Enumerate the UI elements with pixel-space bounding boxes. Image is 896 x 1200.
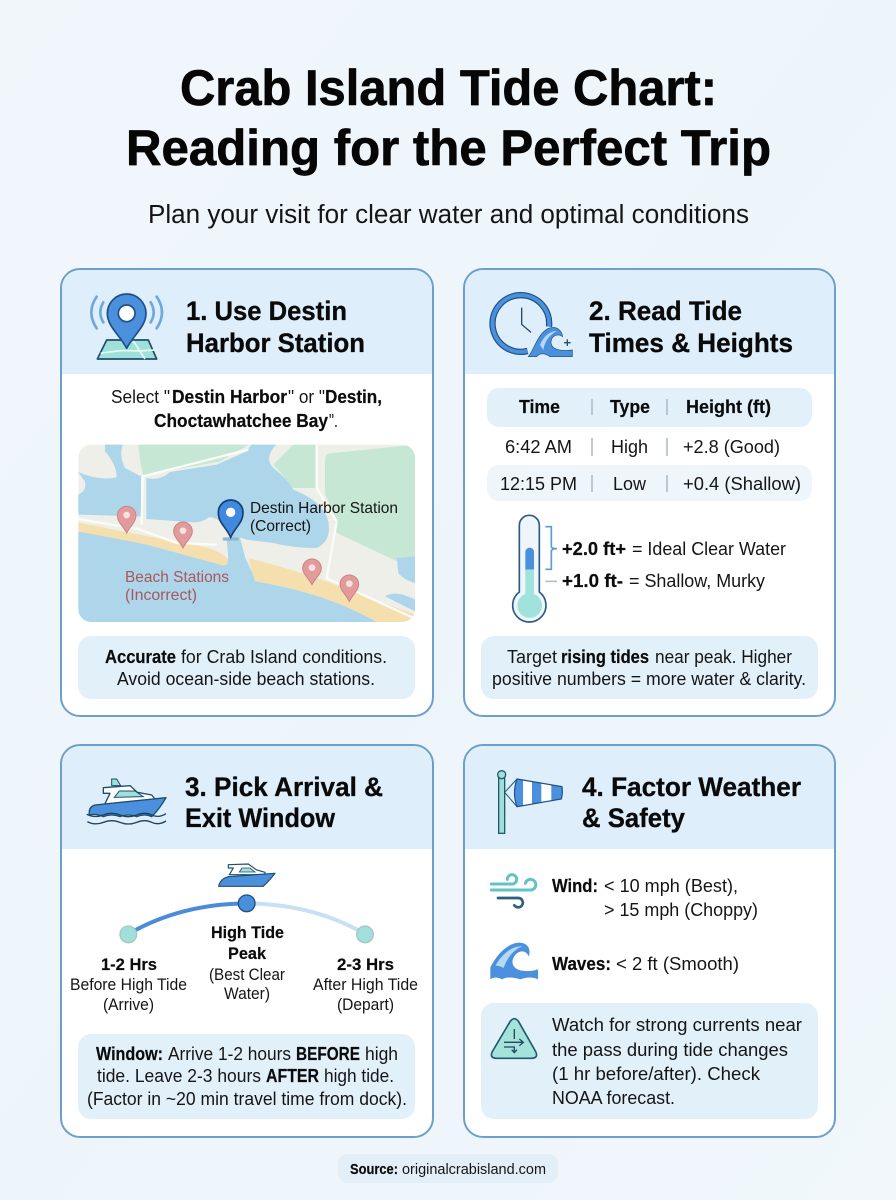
map labels: correct: Destin Harbor Station: [250, 500, 398, 517]
label: after high tide: 2-3 Hrs: [337, 956, 394, 974]
panel 1 heading: Harbor Station: [186, 328, 365, 358]
gauge labels: = Ideal Clear Water: [632, 538, 786, 559]
gauge labels: = Shallow, Murky: [629, 570, 766, 591]
panel: 2. Read Tide Times & Heights: [464, 269, 835, 716]
panel 1 instruction: Choctawhatchee Bay: [154, 411, 328, 431]
map labels: incorrect: Beach Stations: [125, 569, 229, 586]
tide table: Height (ft): [686, 396, 771, 417]
map labels: incorrect: (Incorrect): [125, 587, 197, 604]
tide table: 12:15 PM: [500, 473, 577, 494]
panel 2 heading: [589, 296, 793, 358]
panel 4 callout: NOAA forecast.: [552, 1087, 675, 1108]
panel 1 instruction: ".: [329, 411, 338, 431]
label: high tide peak: (Best Clear: [209, 966, 285, 984]
panel 2 heading: Times & Heights: [589, 328, 793, 358]
panel 2 callout: [481, 636, 818, 699]
panel 3 callout: AFTER: [266, 1066, 319, 1086]
panel 4 heading: & Safety: [582, 803, 685, 833]
waves text: Waves:: [552, 953, 611, 974]
beach station pins: [117, 506, 359, 601]
wind text: [552, 875, 758, 920]
panel 4 heading: 4. Factor Weather: [582, 772, 801, 802]
panel 1 callout: Accurate: [105, 647, 176, 667]
panel: 3. Pick Arrival & Exit Window: [61, 745, 433, 1137]
panel 3 header band: [62, 746, 432, 849]
tide table: [487, 388, 812, 501]
tide table: +2.8 (Good): [683, 436, 780, 457]
panel 3 callout: (Factor in ~20 min travel time from dock).: [87, 1089, 407, 1109]
icon: wind: [491, 875, 536, 907]
panel 1 header band: [62, 270, 432, 374]
panel 3 heading: 3. Pick Arrival &: [185, 772, 383, 802]
gauge labels: [562, 538, 786, 591]
source pill: [338, 1154, 558, 1183]
icon: clock with wave: [493, 295, 572, 357]
panel 1 heading: [186, 296, 365, 358]
tide table: Time: [519, 396, 560, 417]
panel 1 callout: [78, 636, 415, 699]
wind text: < 10 mph (Best),: [604, 875, 738, 896]
panel 2 callout: Target: [507, 647, 557, 667]
waves text: < 2 ft (Smooth): [616, 953, 739, 974]
panel 1 instruction: Destin,: [325, 387, 382, 407]
label: after high tide: After High Tide: [313, 976, 418, 994]
panel 3 callout: high tide.: [324, 1066, 394, 1086]
label: before high tide: Before High Tide: [70, 976, 187, 994]
label: high tide peak: High Tide: [211, 924, 284, 942]
panel 3 heading: [185, 772, 383, 833]
panel 1 instruction: [111, 387, 382, 431]
gauge labels: +1.0 ft-: [562, 570, 623, 591]
map labels: incorrect: [125, 569, 229, 604]
panel: 1. Use Destin Harbor Station: [61, 269, 433, 716]
icon: boat on waves: [87, 779, 166, 824]
panel: 4. Factor Weather & Safety: [464, 745, 835, 1137]
correct station pin: [218, 500, 243, 541]
panel 3 callout: [78, 1034, 415, 1119]
tide table: 6:42 AM: [505, 436, 572, 457]
map labels: correct: (Correct): [250, 518, 311, 535]
panel 3 callout: Arrive 1-2 hours: [168, 1044, 291, 1064]
panel 1 instruction: " or ": [288, 387, 325, 407]
tide window arc diagram: [120, 864, 373, 943]
map labels: correct: [250, 500, 398, 535]
label: after high tide: [313, 956, 418, 1014]
tide table: Low: [613, 473, 647, 494]
wind text: Wind:: [552, 875, 598, 896]
gauge labels: +2.0 ft+: [562, 538, 626, 559]
small boat above peak: [219, 864, 275, 886]
waves text: [552, 953, 739, 974]
title: Reading for the Perfect Trip: [126, 120, 771, 176]
panel 3 callout: tide. Leave 2-3 hours: [97, 1066, 261, 1086]
panel 3 callout: BEFORE: [296, 1044, 360, 1064]
panel 3 callout: Window:: [96, 1044, 163, 1064]
icon: wave: [490, 943, 538, 979]
source pill: Source:: [350, 1162, 398, 1178]
panel 1 callout: Avoid ocean-side beach stations.: [117, 669, 375, 689]
label: high tide peak: Peak: [228, 945, 267, 963]
label: before high tide: (Arrive): [103, 996, 154, 1014]
panel 2 callout: rising tides: [561, 647, 649, 667]
panel 1 heading: 1. Use Destin: [186, 296, 347, 326]
wind text: > 15 mph (Choppy): [604, 899, 758, 920]
icon: windsock: [498, 771, 564, 833]
label: high tide peak: [209, 924, 285, 1003]
subtitle: Plan your visit for clear water and optimal conditions: [148, 201, 749, 229]
panel 3 heading: Exit Window: [185, 803, 336, 833]
tide table: High: [611, 436, 648, 457]
panel 3 callout: high: [365, 1044, 398, 1064]
tide table: Type: [610, 396, 650, 417]
title: [126, 60, 771, 176]
icon: map pin with signal: [91, 294, 162, 359]
title: Crab Island Tide Chart:: [180, 60, 717, 116]
panel 1 instruction: Select ": [111, 387, 170, 407]
source pill: originalcrabisland.com: [402, 1162, 546, 1178]
panel 2 callout: positive numbers = more water & clarity.: [492, 669, 806, 689]
panel 4 callout: Watch for strong currents near: [552, 1014, 802, 1035]
panel 4 heading: [582, 772, 801, 833]
label: before high tide: [70, 956, 187, 1014]
panel 4 header band: [465, 746, 834, 849]
panel 4 callout: (1 hr before/after). Check: [552, 1063, 761, 1084]
map of Destin harbor and beach stations: [78, 444, 415, 622]
panel 1 instruction: Destin Harbor: [172, 387, 287, 407]
icon: tide gauge thermometer: [513, 515, 557, 622]
label: before high tide: 1-2 Hrs: [101, 956, 157, 974]
panel 2 header band: [465, 270, 834, 374]
panel 4 callout: [481, 1003, 818, 1119]
panel 2 callout: near peak. Higher: [655, 647, 792, 667]
panel 1 callout: for Crab Island conditions.: [181, 647, 387, 667]
label: after high tide: (Depart): [337, 996, 394, 1014]
panel 4 callout: the pass during tide changes: [552, 1039, 788, 1060]
icon: current warning triangle: [491, 1019, 537, 1058]
tide table: +0.4 (Shallow): [683, 473, 801, 494]
label: high tide peak: Water): [224, 985, 270, 1003]
panel 2 heading: 2. Read Tide: [589, 296, 742, 326]
